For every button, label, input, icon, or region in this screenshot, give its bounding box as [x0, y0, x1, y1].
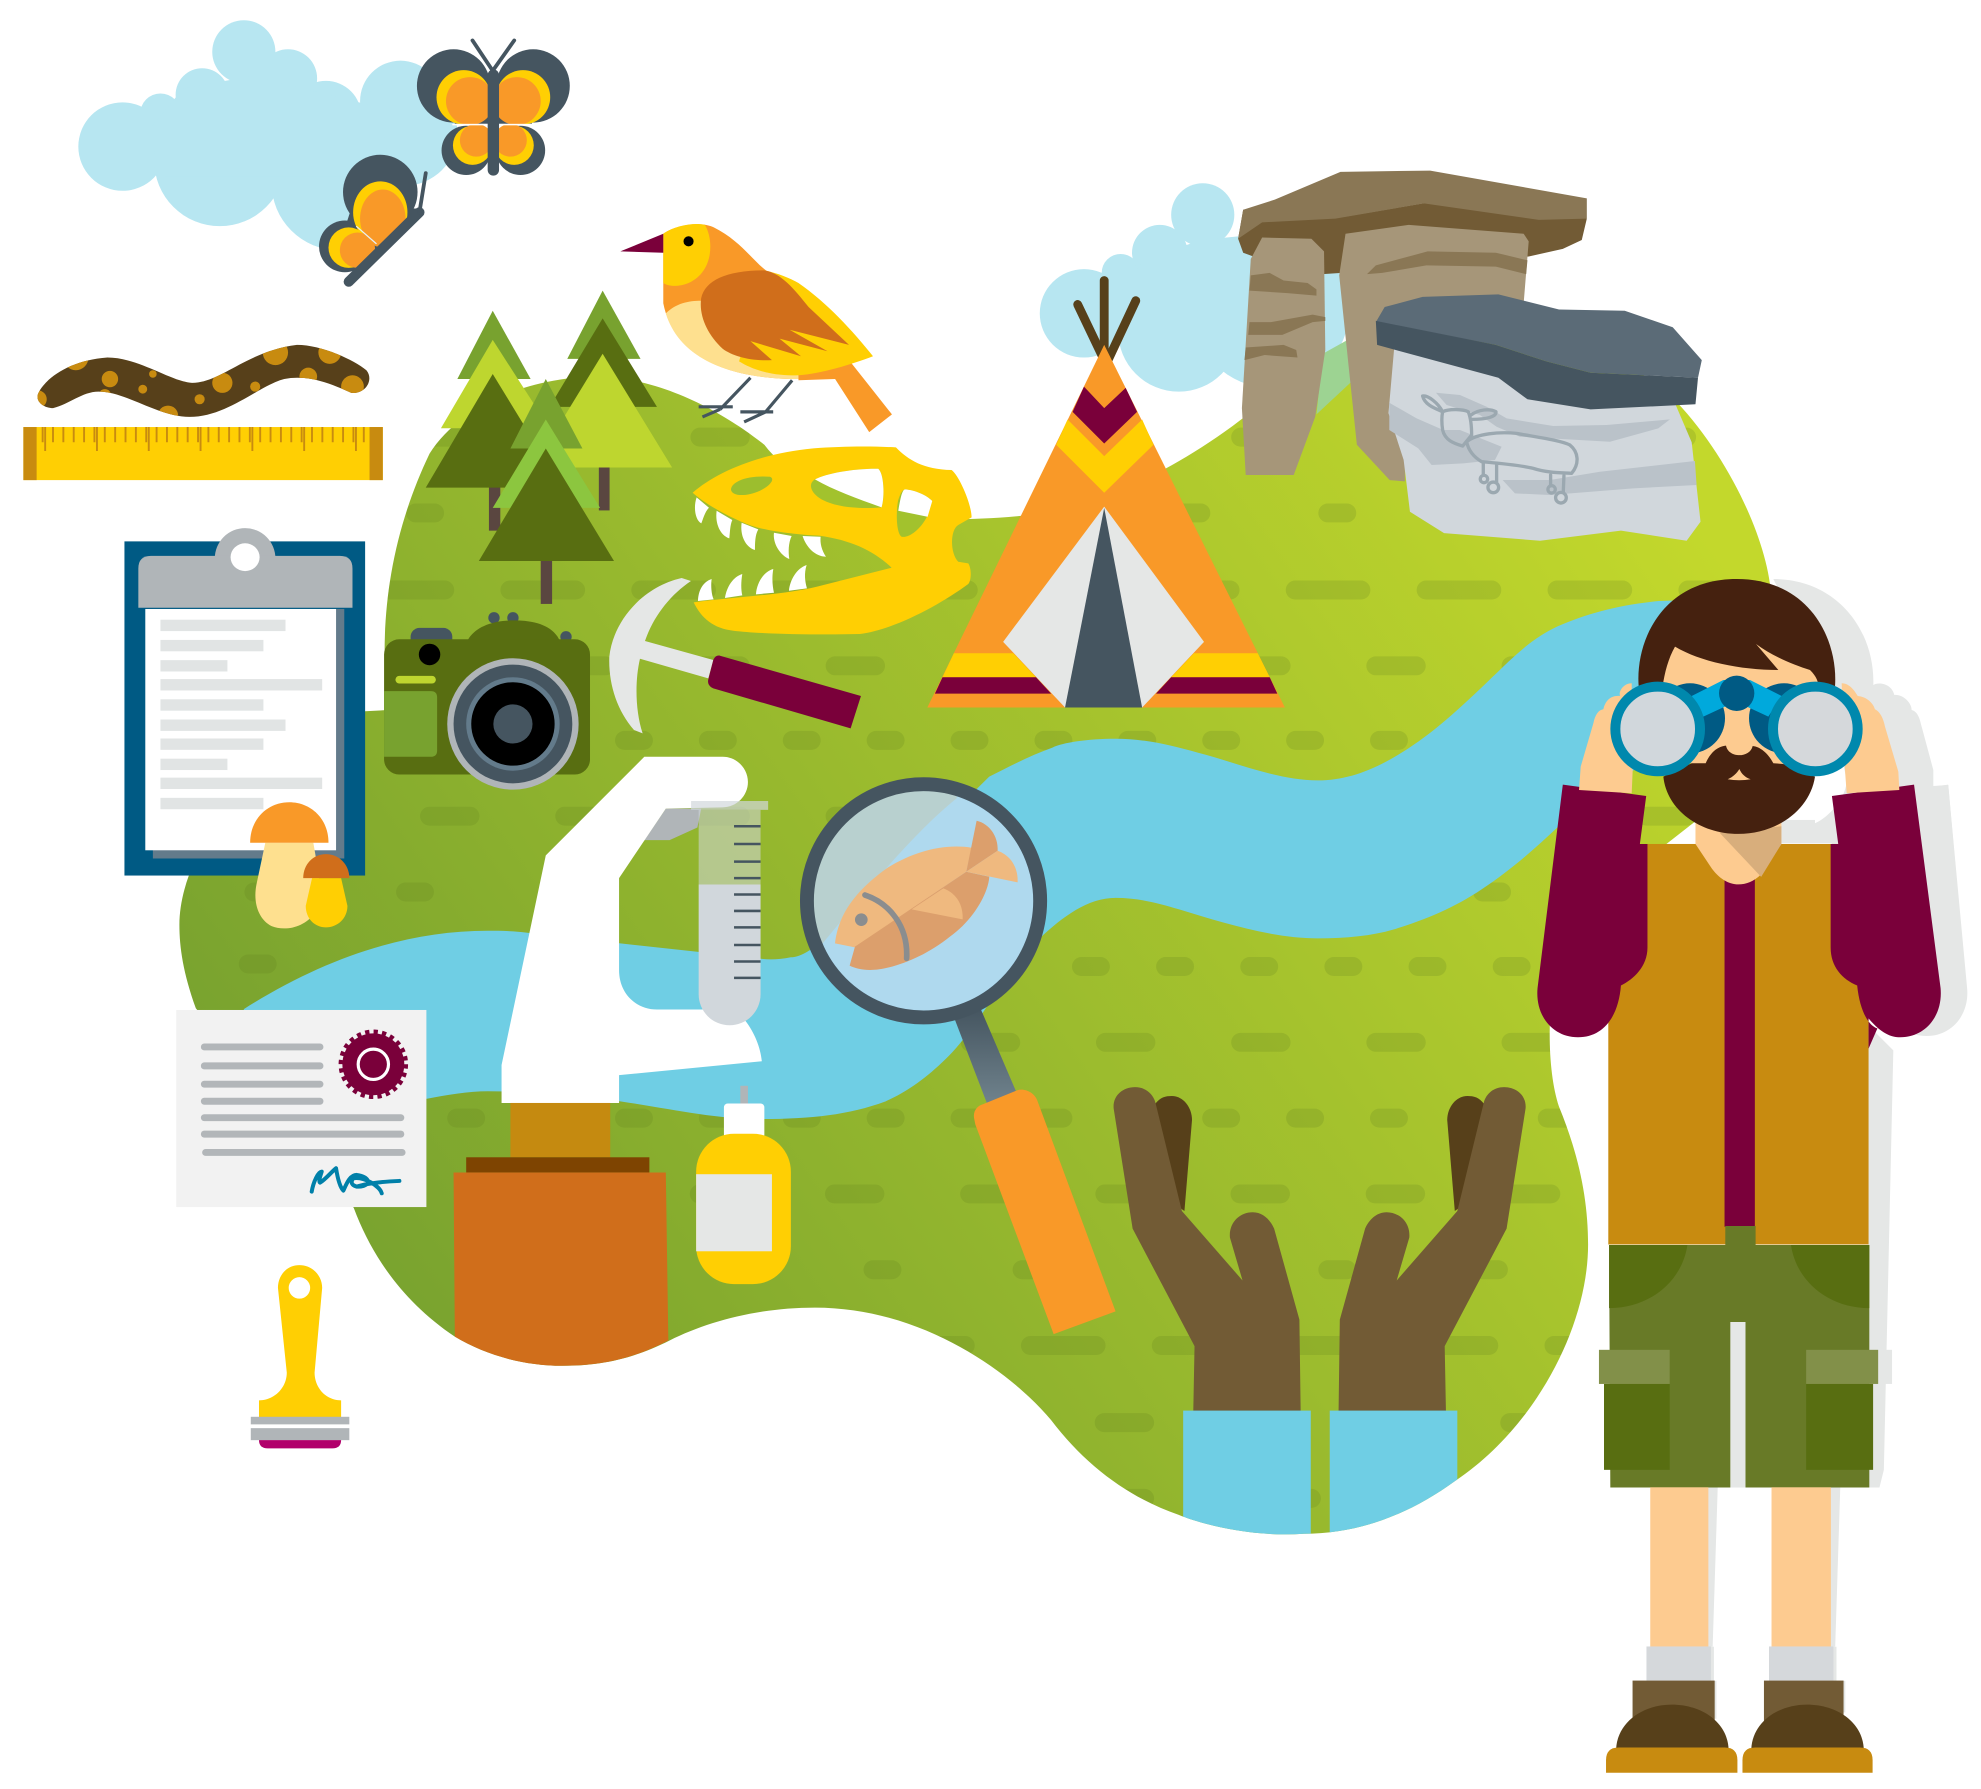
legs and boots — [1606, 1487, 1873, 1773]
geological hammer — [609, 578, 861, 733]
fish — [835, 821, 1018, 970]
beard — [1663, 746, 1815, 834]
cloud: behind tepee — [1040, 183, 1349, 392]
neck — [1695, 809, 1781, 884]
magnifying glass with fish — [793, 773, 1116, 1334]
binoculars — [1615, 676, 1858, 771]
landscape blob — [179, 318, 1772, 1534]
ruler — [23, 427, 383, 480]
river — [241, 600, 1694, 1119]
man shadow — [1708, 579, 1967, 1719]
cow drawing — [1423, 396, 1577, 503]
rock with cave painting — [1376, 294, 1702, 541]
tree: back right — [533, 291, 672, 510]
cuffs — [1183, 1410, 1311, 1534]
microscope — [454, 757, 762, 1366]
clipboard — [124, 528, 365, 876]
plant pot — [454, 1172, 668, 1366]
shorts — [1599, 1226, 1878, 1488]
dinosaur skull — [693, 446, 972, 634]
camera — [384, 612, 590, 790]
signature — [312, 1168, 399, 1193]
rubber stamp — [251, 1265, 349, 1448]
butterfly: side view — [319, 155, 426, 282]
butterfly: front view — [417, 40, 570, 176]
certificate — [176, 1010, 426, 1207]
sleeves — [1537, 785, 1647, 1037]
seal — [342, 1033, 405, 1096]
cloud: top left — [78, 20, 457, 250]
hands holding — [1114, 1087, 1526, 1550]
face — [1660, 644, 1818, 764]
test tube — [691, 801, 768, 1025]
pale hill behind standing stones — [1316, 336, 1354, 414]
bird — [620, 224, 892, 432]
teeth — [695, 497, 826, 601]
tree: front — [479, 379, 614, 604]
hair — [1638, 579, 1835, 687]
mushrooms — [250, 802, 349, 928]
grass dashes — [248, 437, 1754, 1498]
vest — [1608, 844, 1869, 1244]
text lines — [160, 620, 322, 809]
hands — [1579, 683, 1633, 793]
head, hands and binoculars — [1579, 579, 1899, 834]
man — [1537, 579, 1941, 1773]
tepee — [927, 280, 1285, 708]
worm — [37, 344, 370, 417]
tree: back left — [426, 311, 562, 531]
standing stones dolmen — [1238, 171, 1587, 481]
bottle — [696, 1086, 791, 1284]
